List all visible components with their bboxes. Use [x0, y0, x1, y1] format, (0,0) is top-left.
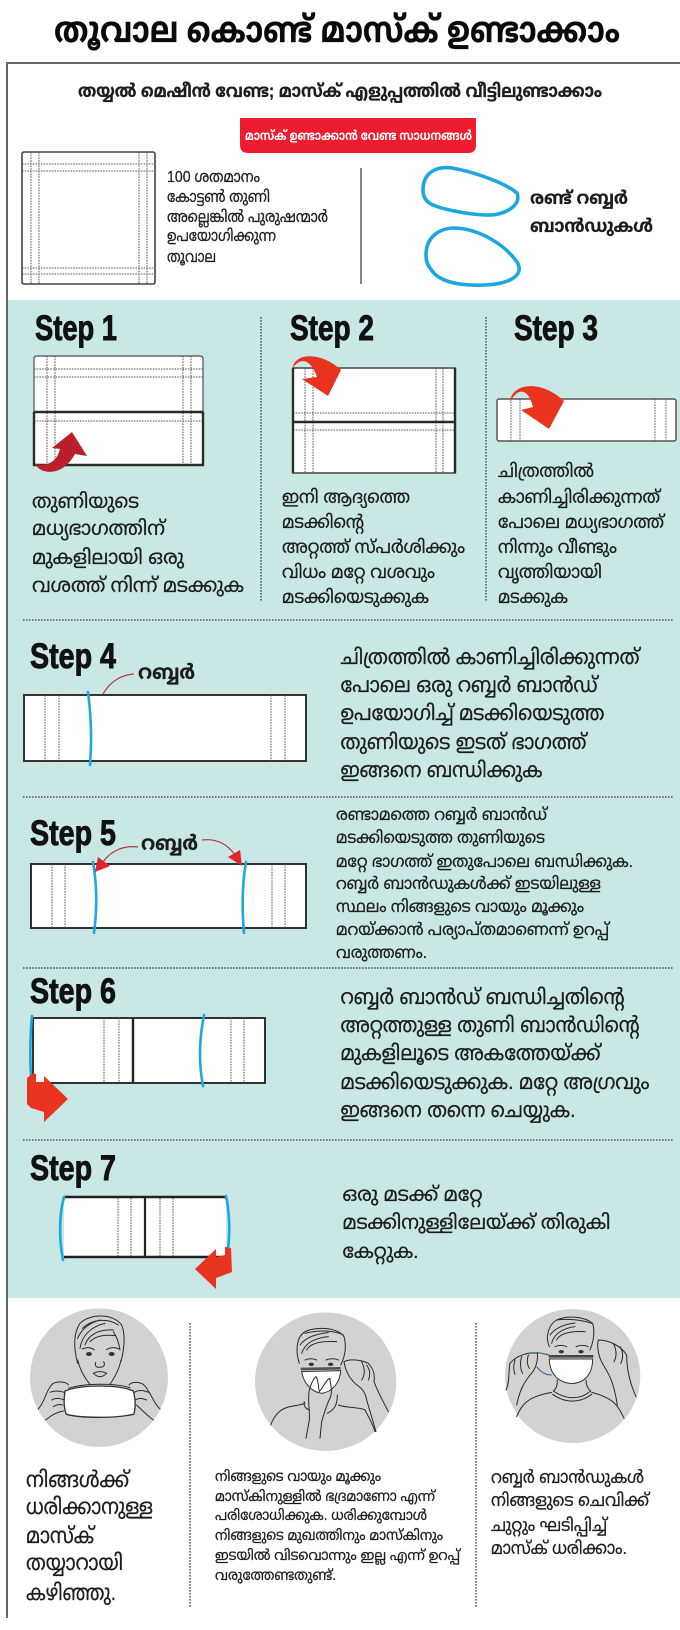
heading: Step 6 — [30, 972, 116, 1011]
text: നിങ്ങളുടെ വായും മൂക്കും — [215, 1469, 381, 1485]
arrow — [35, 432, 87, 472]
text: മടക്കിയെടുത്ത തുണിയുടെ — [336, 829, 545, 848]
text: പോലെ ഒരു റബ്ബർ ബാൻഡ് — [340, 674, 599, 698]
text: വശത്ത് നിന്ന് മടക്കുക — [32, 574, 244, 597]
text: മറയ്ക്കാൻ പര്യാപ്തമാണെന്ന് ഉറപ്പ് — [336, 921, 611, 941]
arrow — [293, 356, 341, 396]
panel: wearing 3 — [491, 1309, 651, 1558]
text: റബ്ബർ ബാൻഡ് ബന്ധിച്ചതിന്റെ — [340, 985, 624, 1012]
red label: മാസ്ക് ഉണ്ടാക്കാൻ വേണ്ട സാധനങ്ങൾ — [245, 128, 472, 143]
text: മടക്കിയെടുക്കുക — [282, 587, 429, 608]
rubber band text: ബാൻഡുകൾ — [530, 216, 653, 236]
illustration: adjusting mask — [255, 1312, 396, 1451]
callout: rubber — [103, 662, 195, 694]
text — [282, 487, 465, 608]
panel: step 2 — [282, 309, 465, 608]
text — [336, 806, 633, 963]
illustration: holding mask — [30, 1308, 168, 1447]
text: നിന്നും വീണ്ടും — [498, 537, 617, 558]
text: ഇങ്ങനെ തന്നെ ചെയ്യുക. — [340, 1099, 576, 1123]
text: തുണിയുടെ — [32, 490, 139, 513]
arrow — [510, 386, 564, 429]
towel text: 100 ശതമാനം — [167, 169, 260, 186]
text — [215, 1469, 462, 1584]
heading: Step 1 — [35, 309, 117, 348]
text: സ്ഥലം നിങ്ങളുടെ വായും മൂക്കും — [336, 898, 584, 917]
text: കേറ്റുക. — [342, 1241, 418, 1265]
text — [26, 1467, 153, 1606]
text: മടക്കിനുള്ളിലേയ്ക്ക് തിരുകി — [342, 1211, 610, 1234]
text: കാണിച്ചിരിക്കുന്നത് — [498, 487, 662, 509]
rubber band text: രണ്ട് റബ്ബർ — [530, 188, 628, 209]
heading: Step 7 — [30, 1149, 116, 1188]
callout: rubber — [95, 833, 242, 872]
towel text: ഉപയോഗിക്കുന്ന — [167, 227, 276, 246]
towel text: കോട്ടൺ തുണി — [167, 188, 270, 207]
arrow — [195, 1247, 232, 1289]
text: പോലെ മധ്യഭാഗത്ത് — [498, 512, 666, 534]
text: മുകളിലായി ഒരു — [32, 546, 184, 569]
text: ഇങ്ങനെ ബന്ധിക്കുക — [340, 758, 543, 782]
heading: Step 5 — [30, 814, 116, 853]
text: തുണിയുടെ ഇടത് ഭാഗത്ത് — [340, 730, 588, 754]
text: മാസ്ക് — [26, 1523, 96, 1548]
text: നിങ്ങളുടെ ചെവിക്ക് — [491, 1490, 651, 1511]
text: ചിത്രത്തിൽ കാണിച്ചിരിക്കുന്നത് — [340, 645, 641, 670]
text — [342, 1184, 610, 1265]
illustration: fitting mask — [505, 1309, 640, 1443]
text: നിങ്ങളുടെ മുഖത്തിനും മാസ്കിനും — [215, 1527, 443, 1544]
panel: step 6 — [27, 972, 650, 1123]
icon: towel — [22, 152, 155, 284]
text: പരിശോധിക്കുക. ധരിക്കുമ്പോൾ — [215, 1508, 427, 1524]
text: വരുത്തേണ്ടതുണ്ട്. — [215, 1567, 336, 1584]
towel diagram — [31, 862, 306, 933]
text: അറ്റത്തുള്ള തുണി ബാൻഡിന്റെ — [340, 1013, 640, 1040]
panel: step 4 — [24, 637, 641, 782]
towel text — [167, 169, 328, 266]
subtitle: തയ്യൽ മെഷീൻ വേണ്ട; മാസ്ക് എളുപ്പത്തിൽ വീട്ടിലുണ്ടാക്കാം — [78, 81, 602, 103]
text — [491, 1467, 651, 1558]
heading: Step 4 — [30, 637, 116, 676]
text: നിങ്ങൾക്ക് — [26, 1467, 131, 1492]
text: മാസ്ക് ധരിക്കാം. — [491, 1538, 627, 1558]
text: മടക്കുക — [498, 587, 568, 608]
towel diagram — [497, 399, 676, 441]
callout: rubber: റബ്ബർ — [138, 662, 195, 685]
text: റബ്ബർ ബാൻഡുകൾക്ക് ഇടയിലുള്ള — [336, 875, 601, 894]
arrow — [27, 1073, 68, 1122]
text: രണ്ടാമത്തെ റബ്ബർ ബാൻഡ് — [336, 806, 549, 825]
panel: step 1 — [32, 309, 244, 597]
panel: step 3 — [497, 309, 676, 608]
text: മടക്കിയെടുക്കുക. മറ്റേ അഗ്രവും — [340, 1070, 650, 1096]
heading: Step 3 — [514, 309, 598, 348]
text — [32, 490, 244, 597]
text: വിധം മറ്റേ വശവും — [282, 562, 435, 584]
text: മടക്കിന്റെ — [282, 512, 364, 535]
panel: wearing 2 — [215, 1312, 462, 1584]
text: ഇനി ആദ്യത്തെ — [282, 487, 410, 509]
text: റബ്ബർ ബാൻഡുകൾ — [491, 1467, 644, 1489]
text: ഒരു മടക്ക് മറ്റേ — [342, 1184, 482, 1208]
text: ധരിക്കാനുള്ള — [26, 1494, 153, 1520]
towel diagram — [30, 1015, 265, 1086]
text: ചിത്രത്തിൽ — [498, 461, 594, 481]
text: തയ്യാറായി — [26, 1550, 123, 1576]
text — [498, 461, 666, 608]
towel diagram — [60, 1196, 229, 1260]
red label — [240, 118, 476, 153]
text — [340, 645, 641, 782]
text — [340, 985, 650, 1123]
text: മറ്റേ ഭാഗത്ത് ഇതുപോലെ ബന്ധിക്കുക. — [336, 853, 633, 873]
panel: wearing 1 — [26, 1308, 168, 1606]
towel diagram — [293, 368, 455, 473]
towel text: തൂവാല — [167, 249, 216, 266]
text: മാസ്കിനുള്ളിൽ ഭദ്രമാണോ എന്ന് — [215, 1488, 437, 1505]
text: കഴിഞ്ഞു. — [26, 1580, 116, 1606]
text: മധ്യഭാഗത്തിന് — [32, 517, 167, 541]
towel diagram — [34, 356, 203, 465]
callout: rubber: റബ്ബർ — [141, 833, 198, 856]
towel text: അല്ലെങ്കിൽ പുരുഷന്മാർ — [167, 208, 328, 227]
towel diagram — [24, 692, 306, 765]
panel: step 5 — [30, 806, 633, 963]
text: അറ്റത്ത് സ്പർശിക്കും — [282, 537, 465, 559]
panel: materials — [22, 81, 653, 285]
text: വൃത്തിയായി — [498, 562, 602, 584]
text: മുകളിലൂടെ അകത്തേയ്ക്ക് — [340, 1041, 602, 1066]
text: ഉപയോഗിച്ച് മടക്കിയെടുത്ത — [340, 701, 605, 726]
column dividers — [261, 317, 486, 602]
text: ഇടയിൽ വിടവൊന്നും ഇല്ല എന്ന് ഉറപ്പ് — [215, 1547, 462, 1566]
heading: Step 2 — [290, 309, 374, 348]
rubber band text — [530, 188, 653, 236]
teal panel — [8, 300, 680, 1298]
panel: step 7 — [30, 1149, 610, 1289]
text: വരുത്തണം. — [336, 944, 427, 963]
icon: rubber bands — [423, 168, 519, 285]
text: ചുറ്റും ഘടിപ്പിച്ച് — [491, 1515, 609, 1537]
